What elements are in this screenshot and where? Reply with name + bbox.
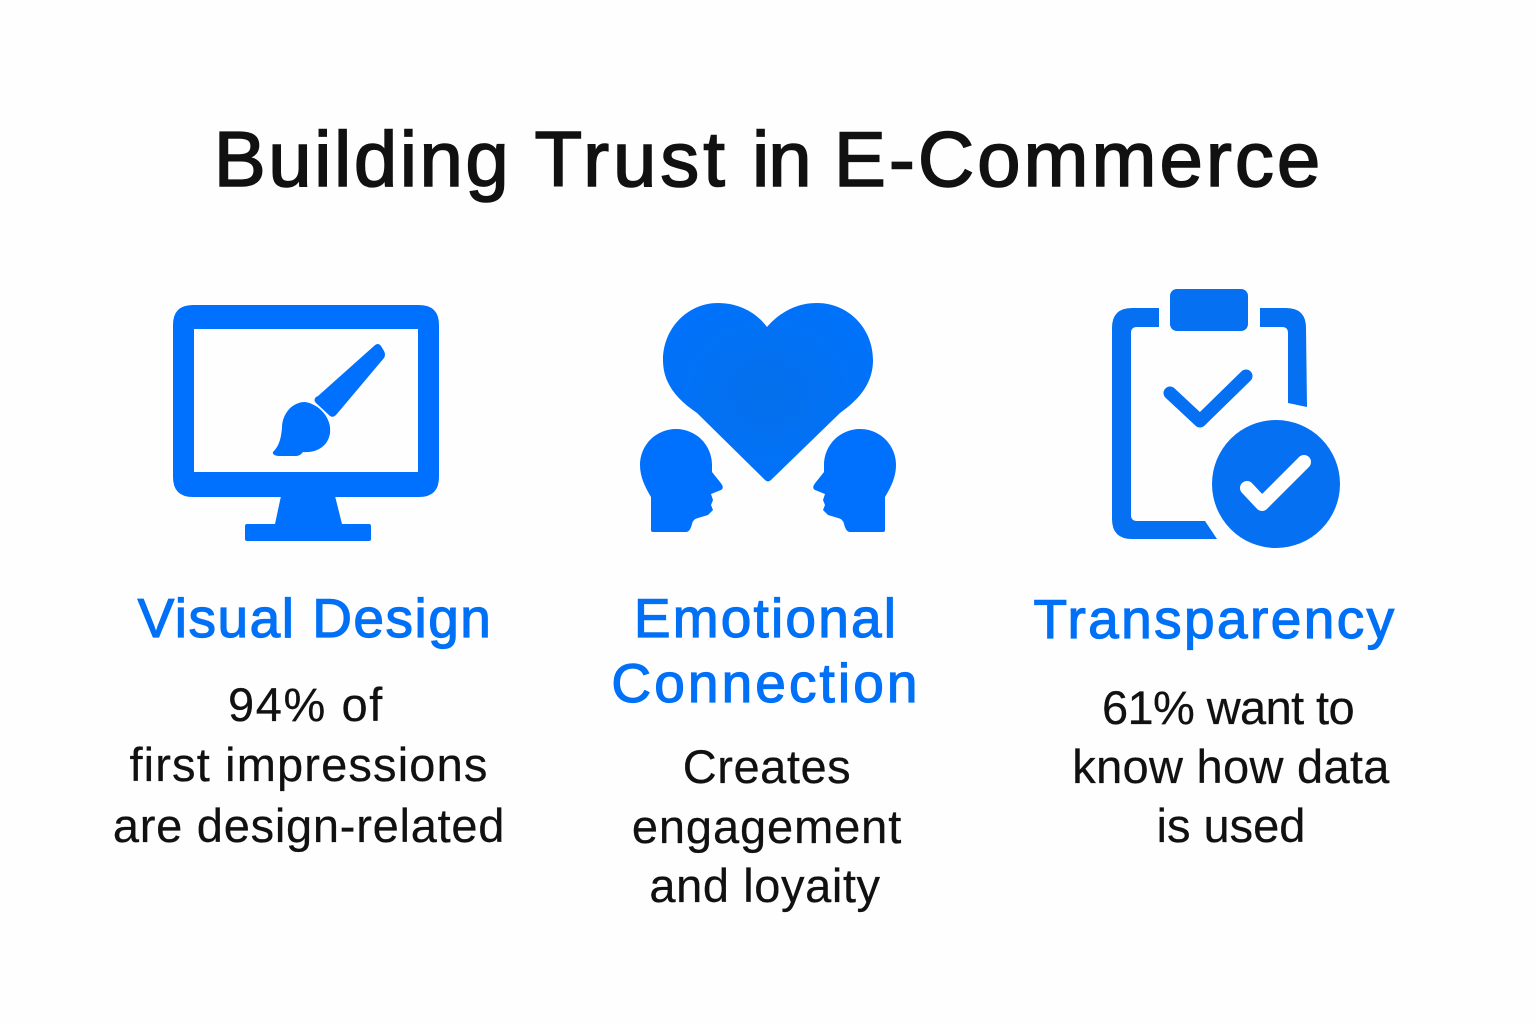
icon: monitor with paintbrush [173,305,439,541]
text: visual design stat: 94% of [228,678,384,731]
icon: right face [813,429,896,532]
text: visual design stat [113,678,505,852]
text: transparency stat: 61% want to [1102,681,1354,734]
icon: heart with two faces [640,303,896,532]
heading: Emotional Connection: Connection [611,652,921,714]
heading: Emotional Connection [611,587,921,714]
heading: Transparency: Transparency [1033,588,1397,650]
text: transparency stat: know how data [1072,740,1390,793]
heading: Emotional Connection: Emotional [634,587,898,649]
text: emotional connection description [632,740,902,912]
text: visual design stat: are design-related [113,799,505,852]
text: transparency stat [1072,681,1390,852]
text: emotional connection description: Creates [683,740,851,793]
icon: left face [640,429,723,532]
title: Building Trust in E-Commerce [214,115,1323,203]
icon: clipboard with check badge [1112,289,1340,548]
text: visual design stat: first impressions [129,738,489,791]
icon: heart [663,303,873,482]
text: transparency stat: is used [1157,799,1305,852]
text: emotional connection description: engagement [632,800,902,852]
heading: Visual Design: Visual Design [138,587,492,649]
text: emotional connection description: and loyaity [649,859,881,912]
